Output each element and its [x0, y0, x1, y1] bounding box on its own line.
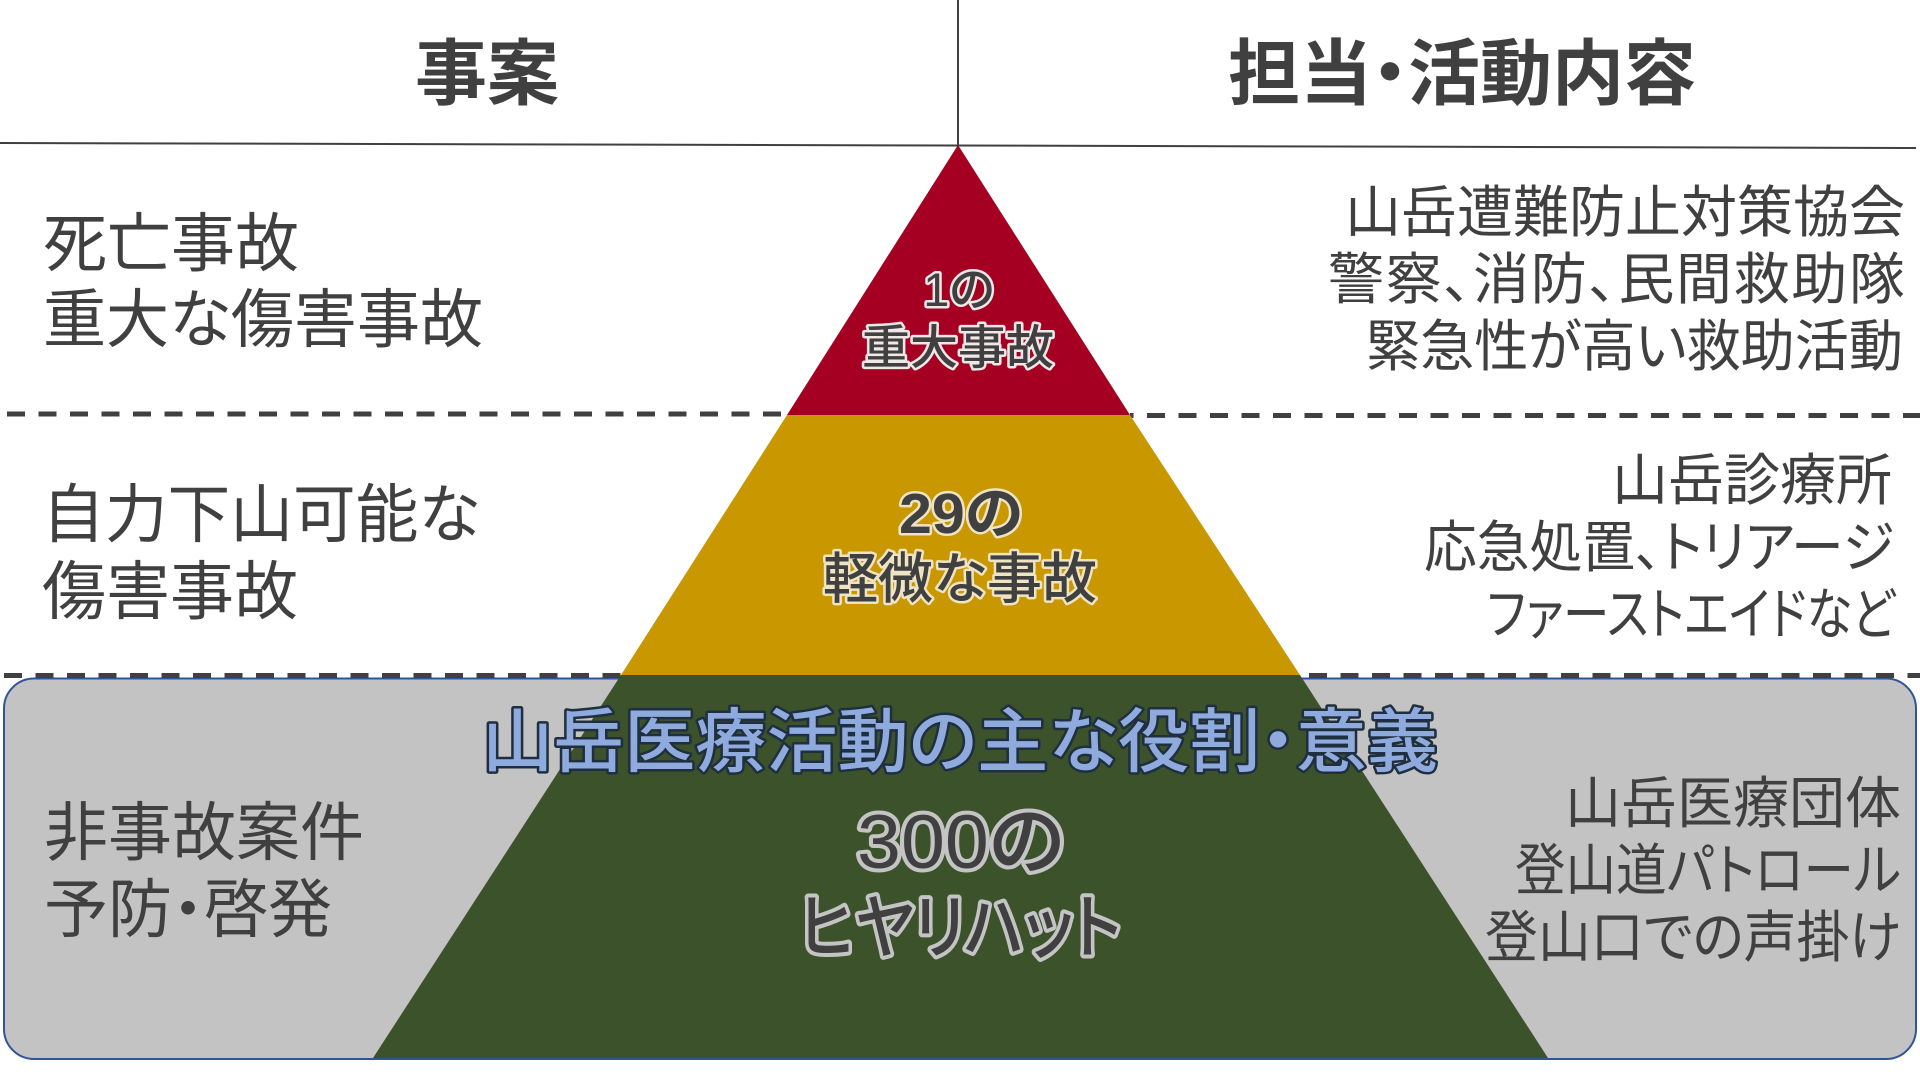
left text: injury allowing self descent: 傷害事故: [42, 556, 298, 628]
pyramid tier: green bottom: [373, 675, 1548, 1058]
pyramid tier: red top: [787, 145, 1130, 415]
right text: mountain clinics: [1424, 449, 1897, 646]
tier label: 29 minor accidents: 軽微な事故: [823, 548, 1097, 610]
right text: mountain medical groups: 山岳医療団体: [1565, 772, 1901, 835]
tier label: 29 minor accidents: [823, 482, 1097, 610]
tier label: 1 serious accident: 重大事故: [862, 321, 1054, 374]
right text: rescue organisations: 緊急性が高い救助活動: [1366, 315, 1903, 378]
tier label: 29 minor accidents: 29の: [899, 482, 1023, 546]
tier label: 300 near misses: [799, 800, 1121, 967]
tier label: 300 near misses: 300の: [857, 800, 1065, 885]
dashed separators: [0, 414, 1920, 676]
left text: fatal and serious injury: 死亡事故: [43, 208, 299, 280]
left text: injury allowing self descent: 自力下山可能な: [42, 479, 480, 551]
left text: fatal and serious injury: [43, 208, 483, 356]
left text: non-accident cases: [44, 797, 364, 946]
heading: incidents: 事案: [415, 35, 559, 115]
tier label: 1 serious accident: [862, 263, 1054, 374]
header divider: [957, 0, 959, 146]
right text: mountain medical groups: 登山口での声掛け: [1485, 906, 1901, 969]
tier label: 1 serious accident: 1の: [923, 263, 995, 316]
right text: mountain clinics: 応急処置、トリアージ: [1424, 516, 1894, 579]
right text: mountain clinics: 山岳診療所: [1612, 449, 1892, 512]
left text: injury allowing self descent: [42, 479, 480, 628]
title: main roles and significance: 山岳医療活動の主な役割・意義: [482, 703, 1438, 781]
header rule: [0, 143, 1916, 148]
right text: rescue organisations: [1328, 181, 1905, 378]
right text: rescue organisations: 警察、消防、民間救助隊: [1328, 248, 1905, 311]
right text: rescue organisations: 山岳遭難防止対策協会: [1345, 181, 1905, 244]
pyramid tier: gold middle: [621, 415, 1300, 675]
right text: mountain medical groups: [1485, 772, 1901, 969]
panel: grey rounded background for the bottom tier: [4, 678, 1916, 1059]
left text: fatal and serious injury: 重大な傷害事故: [43, 284, 483, 356]
tier label: 300 near misses: ヒヤリハット: [799, 889, 1121, 967]
heading: responsible parties and activities: 担当・活動内容: [1228, 35, 1696, 115]
left text: non-accident cases: 予防・啓発: [44, 874, 332, 946]
left text: non-accident cases: 非事故案件: [44, 797, 364, 869]
